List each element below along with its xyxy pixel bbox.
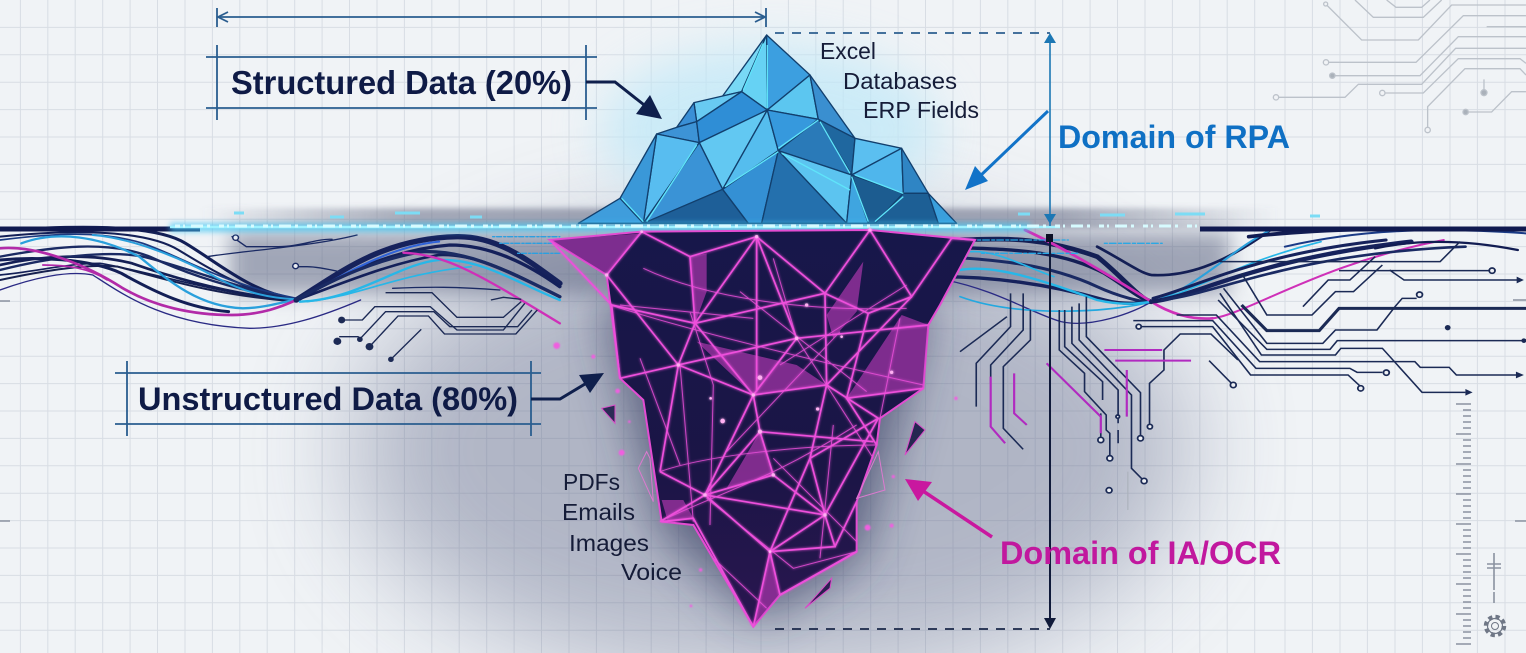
text: structured examples: ERP Fields (863, 97, 979, 123)
depth dimension line (775, 33, 1056, 629)
tip of the iceberg: structured data (578, 35, 957, 223)
icon: faint circuit decoration, top right (1273, 0, 1526, 133)
text: unstructured examples (562, 469, 682, 585)
right data streams (938, 228, 1526, 323)
text: unstructured examples: Images (569, 530, 649, 556)
left circuit traces (333, 293, 537, 362)
text: unstructured examples: Voice (621, 559, 682, 585)
label: domain of IA/OCR: Domain of IA/OCR (1000, 535, 1281, 571)
icon: gear (1486, 617, 1504, 635)
arrow: structured data to iceberg tip (586, 82, 662, 119)
label: unstructured data: Unstructured Data (80%) (138, 381, 518, 417)
text: unstructured examples: Emails (562, 499, 635, 525)
left data streams (0, 227, 560, 328)
text: structured examples: Excel (820, 38, 876, 64)
submerged iceberg: unstructured data (550, 228, 975, 627)
right circuit traces (960, 242, 1526, 510)
arrow: domain of IA/OCR (905, 479, 992, 537)
text: unstructured examples: PDFs (563, 469, 620, 495)
text: structured examples (820, 38, 979, 123)
width dimension line (217, 8, 766, 27)
label: structured data: Structured Data (20%) (231, 64, 572, 101)
underwater shadow (200, 45, 1280, 653)
ruler scale (0, 300, 1526, 644)
text: structured examples: Databases (843, 68, 957, 94)
label: structured data (206, 45, 597, 120)
label: domain of RPA: Domain of RPA (1058, 119, 1290, 155)
label: unstructured data (115, 361, 541, 436)
water surface line (0, 213, 1526, 232)
arrow: domain of RPA (965, 111, 1048, 190)
arrow: unstructured data to iceberg base (531, 373, 604, 399)
floating shards (553, 342, 958, 608)
